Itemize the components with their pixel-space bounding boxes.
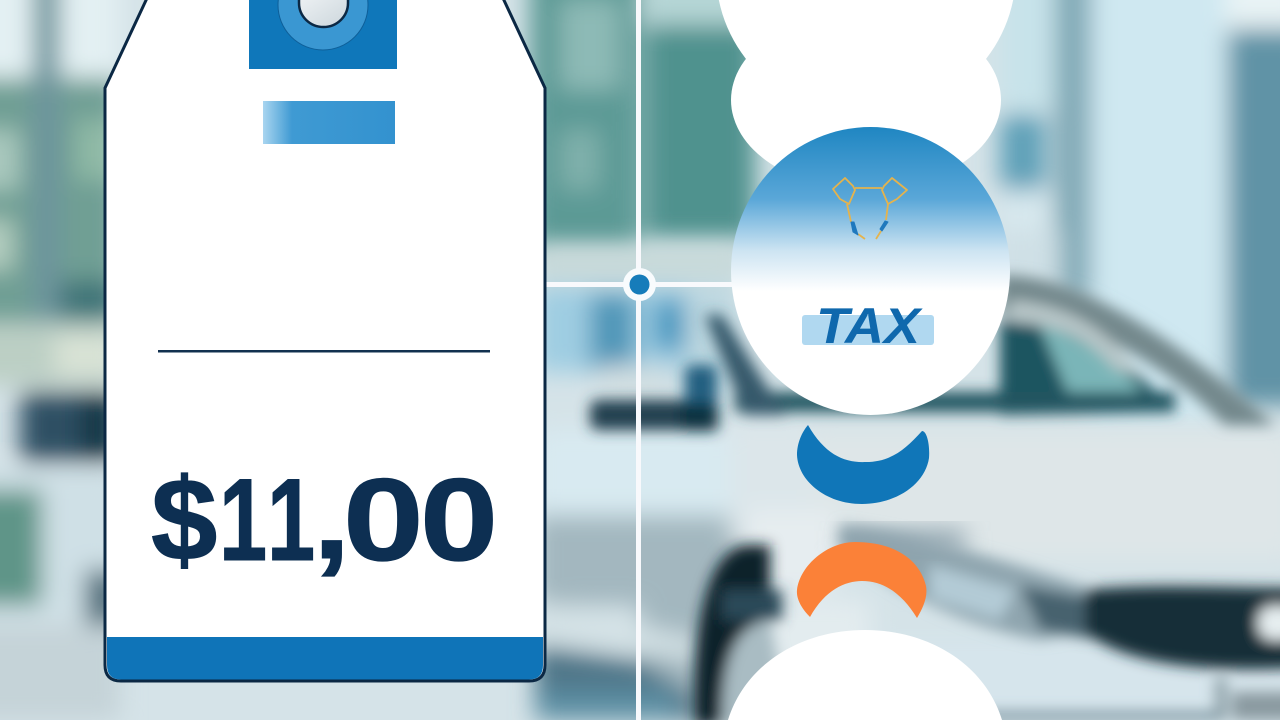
tax label: TAX (816, 298, 923, 354)
price text: 1 (267, 454, 315, 585)
background: left strip (0, 0, 120, 720)
background: shadow above orange crescent (845, 530, 965, 552)
price text: , (313, 452, 350, 583)
price text: 0 (420, 455, 498, 585)
bottom white circle (728, 630, 1002, 720)
orange crescent (797, 542, 926, 618)
background: headlight and grille (840, 525, 1280, 720)
background: mirror (590, 365, 718, 431)
road-side lower body (830, 640, 1280, 720)
icon: gold outline glyph (833, 178, 907, 239)
price text (151, 452, 498, 586)
background: side glass (705, 275, 1275, 425)
price tag panel (105, 0, 545, 681)
tax highlight stroke (802, 315, 934, 345)
window (535, 287, 735, 372)
tag bottom band (107, 637, 543, 680)
tax circle (731, 127, 1010, 415)
background: upper showroom (530, 0, 1280, 420)
node marker on guide line (623, 268, 656, 301)
background: wheel arch (695, 545, 790, 720)
second white circle (731, 10, 1001, 190)
price text: $ (151, 455, 217, 586)
divider line (158, 350, 490, 352)
icon: tag hole on blue square (249, 0, 397, 69)
tag body (105, 0, 545, 681)
white circle stack (716, 0, 1016, 720)
price text: 1 (219, 454, 267, 585)
top white circle (716, 0, 1016, 117)
crosshair guide lines (545, 0, 735, 720)
price text: 0 (343, 454, 424, 585)
label bar placeholder (263, 101, 395, 144)
hood and door (535, 430, 1280, 560)
background: car body (535, 245, 1280, 720)
blue crescent (797, 425, 929, 504)
